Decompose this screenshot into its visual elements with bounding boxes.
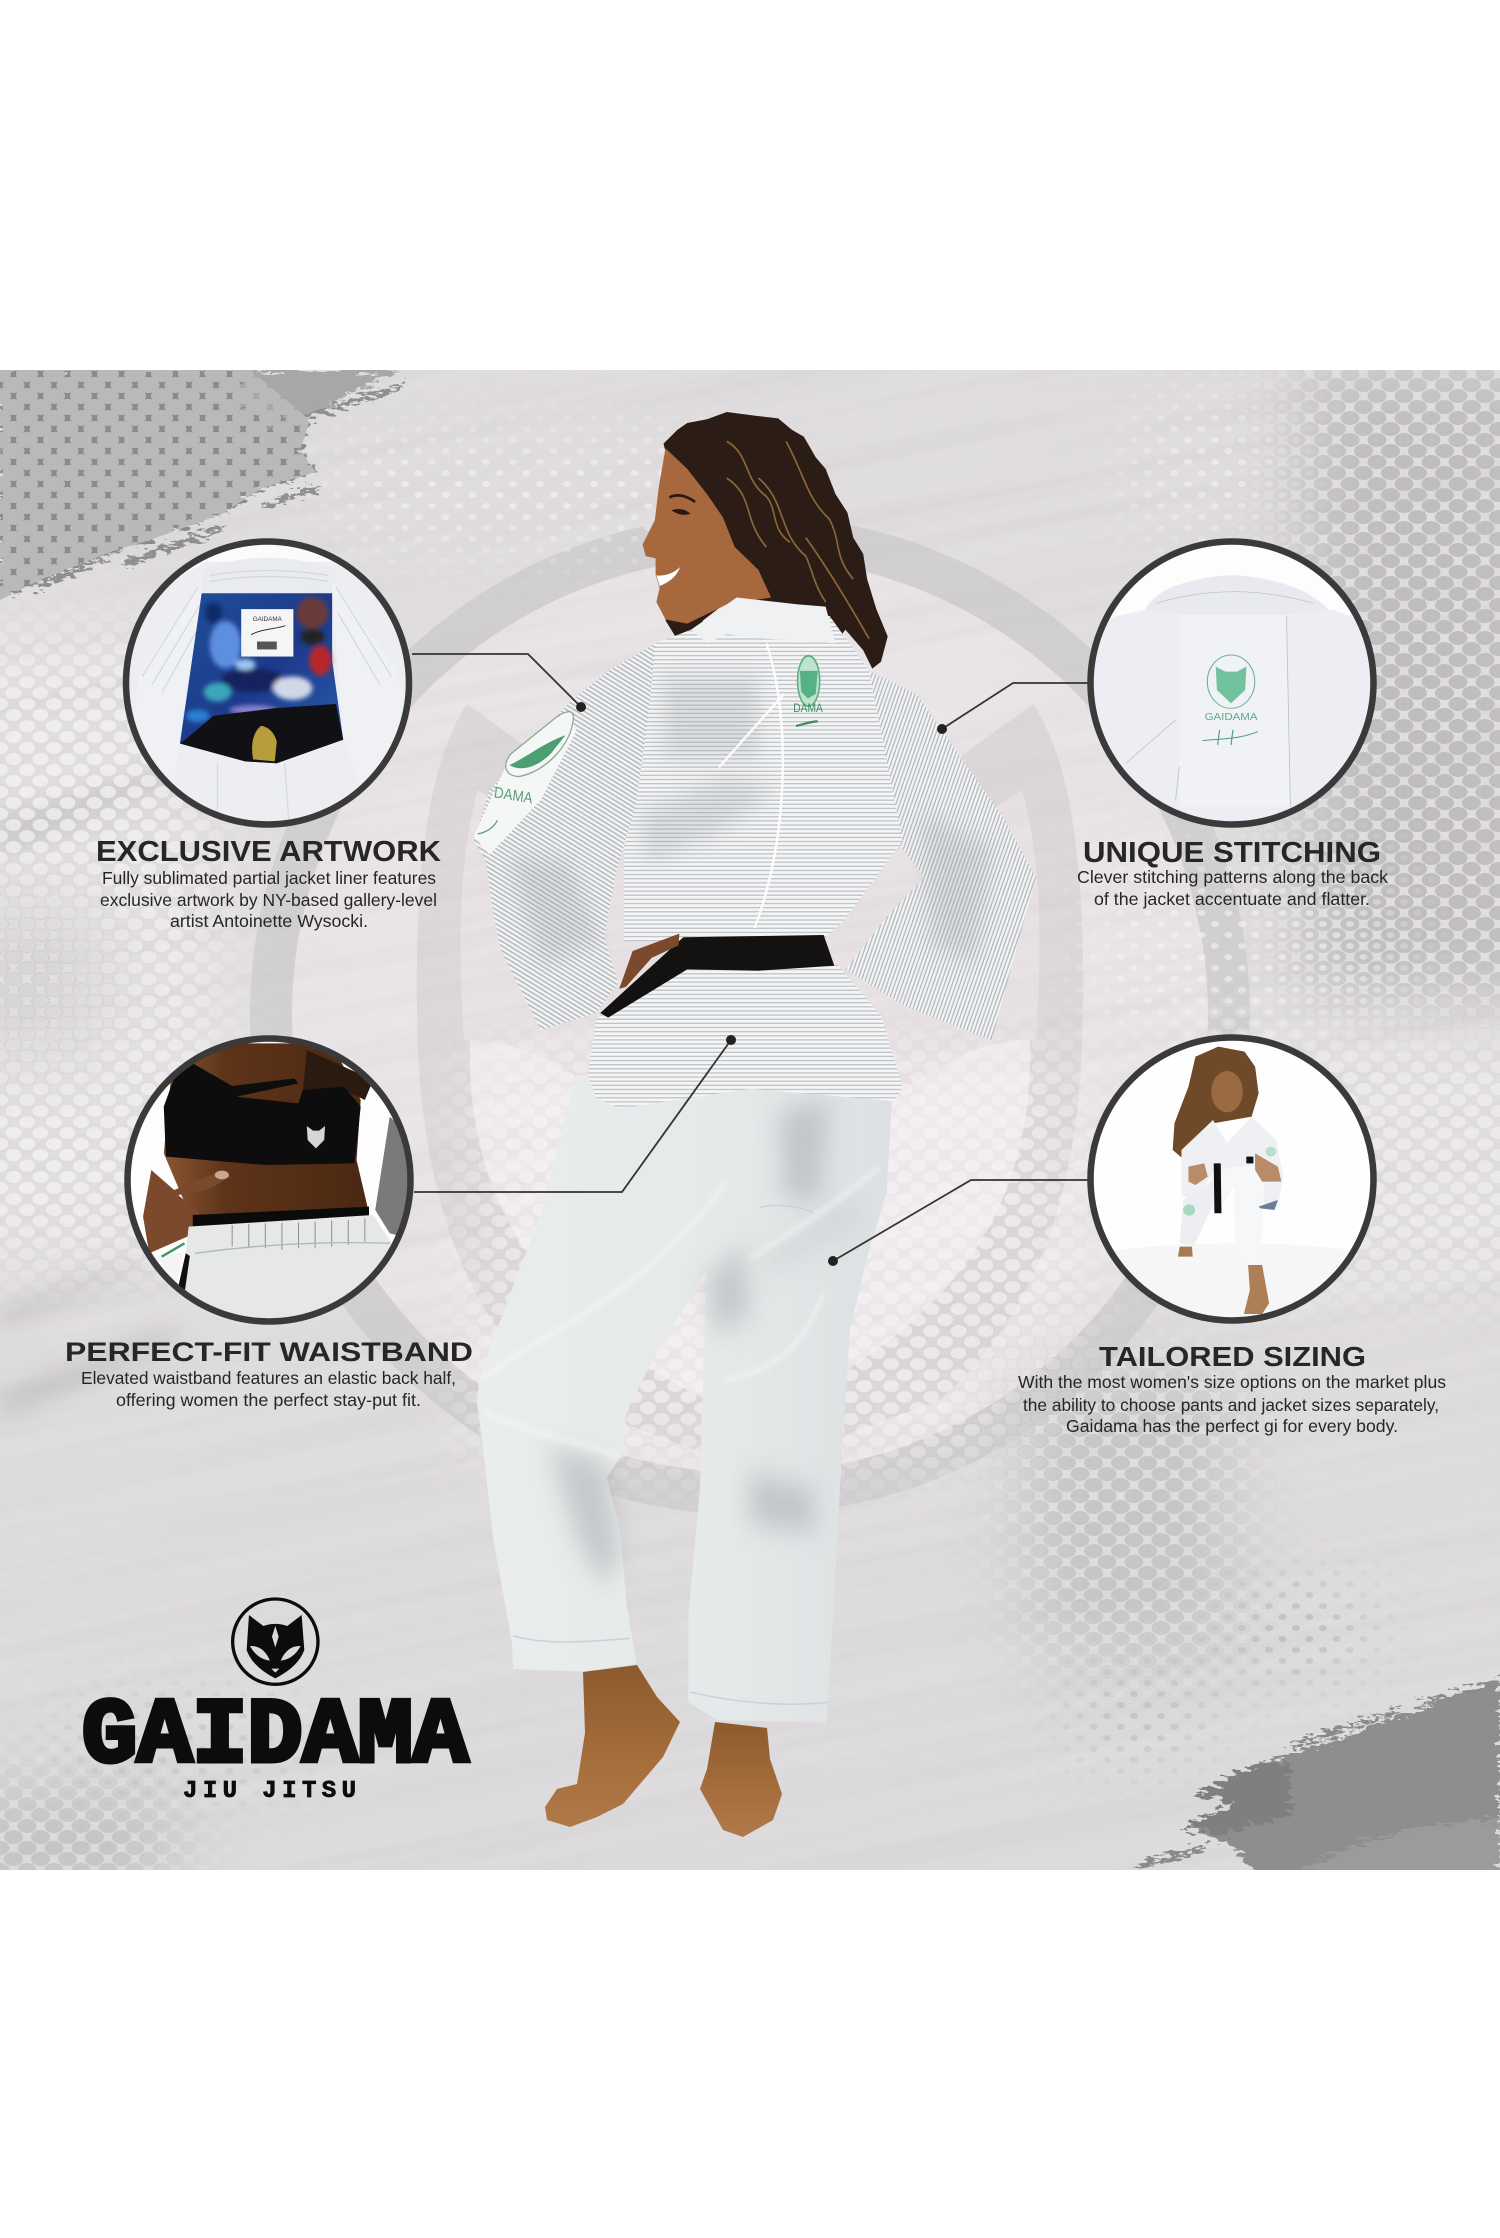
liner artwork <box>180 593 343 763</box>
infographic canvas <box>0 370 1500 1870</box>
leader line: exclusive artwork <box>412 654 586 712</box>
model figure <box>474 412 1036 1837</box>
text block: exclusive artwork: Fully sublimated partial jacket liner features <box>102 868 436 888</box>
watermark ring <box>250 515 1250 1515</box>
hair <box>664 412 888 669</box>
left sleeve <box>474 643 656 1030</box>
neck badge: green embroidery: DAMA <box>793 703 823 715</box>
text block: unique stitching: of the jacket accentuate and flatter. <box>1094 889 1370 909</box>
text block: exclusive artwork <box>96 836 441 931</box>
text block: perfect-fit waistband: offering women the perfect stay-put fit. <box>116 1390 421 1410</box>
text block: exclusive artwork: exclusive artwork by NY-based gallery-level <box>100 890 437 910</box>
text block: perfect-fit waistband: PERFECT-FIT WAISTBAND <box>65 1337 473 1367</box>
hand <box>619 934 679 989</box>
text block: tailored sizing: the ability to choose pants and jacket sizes separately, <box>1023 1395 1439 1415</box>
leader line: waistband <box>414 1035 736 1192</box>
brand logo: GAIDAMA <box>82 1684 469 1789</box>
face <box>643 448 771 624</box>
leader line: unique stitching <box>937 683 1088 734</box>
text block: tailored sizing: Gaidama has the perfect gi for every body. <box>1066 1416 1398 1436</box>
text block: perfect-fit waistband <box>65 1337 473 1410</box>
icon: fox mask <box>233 1599 318 1684</box>
callout photo: unique stitching: GAIDAMA <box>1205 712 1258 723</box>
soft brush streaks <box>0 772 176 1418</box>
shoulder badge: green embroidery: DAMA <box>493 784 534 808</box>
callout photo: exclusive artwork: GAIDAMA <box>253 616 283 623</box>
brand logo <box>82 1599 469 1805</box>
background panel <box>0 370 1500 1870</box>
text block: unique stitching: Clever stitching patterns along the back <box>1077 867 1388 887</box>
callout photo: tailored sizing <box>1090 1037 1381 1333</box>
jacket back <box>608 616 903 942</box>
text block: exclusive artwork: EXCLUSIVE ARTWORK <box>96 836 441 868</box>
jacket skirt <box>588 965 903 1109</box>
shoulder badge: green embroidery <box>478 712 573 834</box>
text block: tailored sizing: TAILORED SIZING <box>1099 1341 1366 1372</box>
foot: left <box>545 1665 680 1827</box>
collar <box>691 597 836 643</box>
belt <box>600 935 834 1018</box>
brand logo: JIU JITSU <box>183 1778 356 1805</box>
halftone dots <box>0 370 1500 1870</box>
brush stroke top left <box>0 370 404 600</box>
text block: tailored sizing <box>1018 1341 1446 1436</box>
callout photo: perfect-fit waistband <box>127 1038 415 1327</box>
text block: perfect-fit waistband: Elevated waistband features an elastic back half, <box>81 1368 456 1388</box>
callout photo: unique stitching <box>1084 541 1382 833</box>
text block: unique stitching: UNIQUE STITCHING <box>1083 837 1381 869</box>
text block: exclusive artwork: artist Antoinette Wysocki. <box>170 911 368 931</box>
right sleeve <box>845 671 1036 1041</box>
pants <box>477 1075 893 1723</box>
stitched logo <box>1207 655 1255 708</box>
leader line: tailored sizing <box>828 1180 1088 1266</box>
text block: tailored sizing: With the most women's size options on the market plus <box>1018 1372 1446 1392</box>
neck badge: green embroidery <box>793 656 823 726</box>
foot: right <box>700 1722 782 1837</box>
text block: unique stitching <box>1077 837 1388 909</box>
brush stroke bottom right <box>1130 1678 1500 1880</box>
callout photo: exclusive artwork <box>119 534 427 834</box>
